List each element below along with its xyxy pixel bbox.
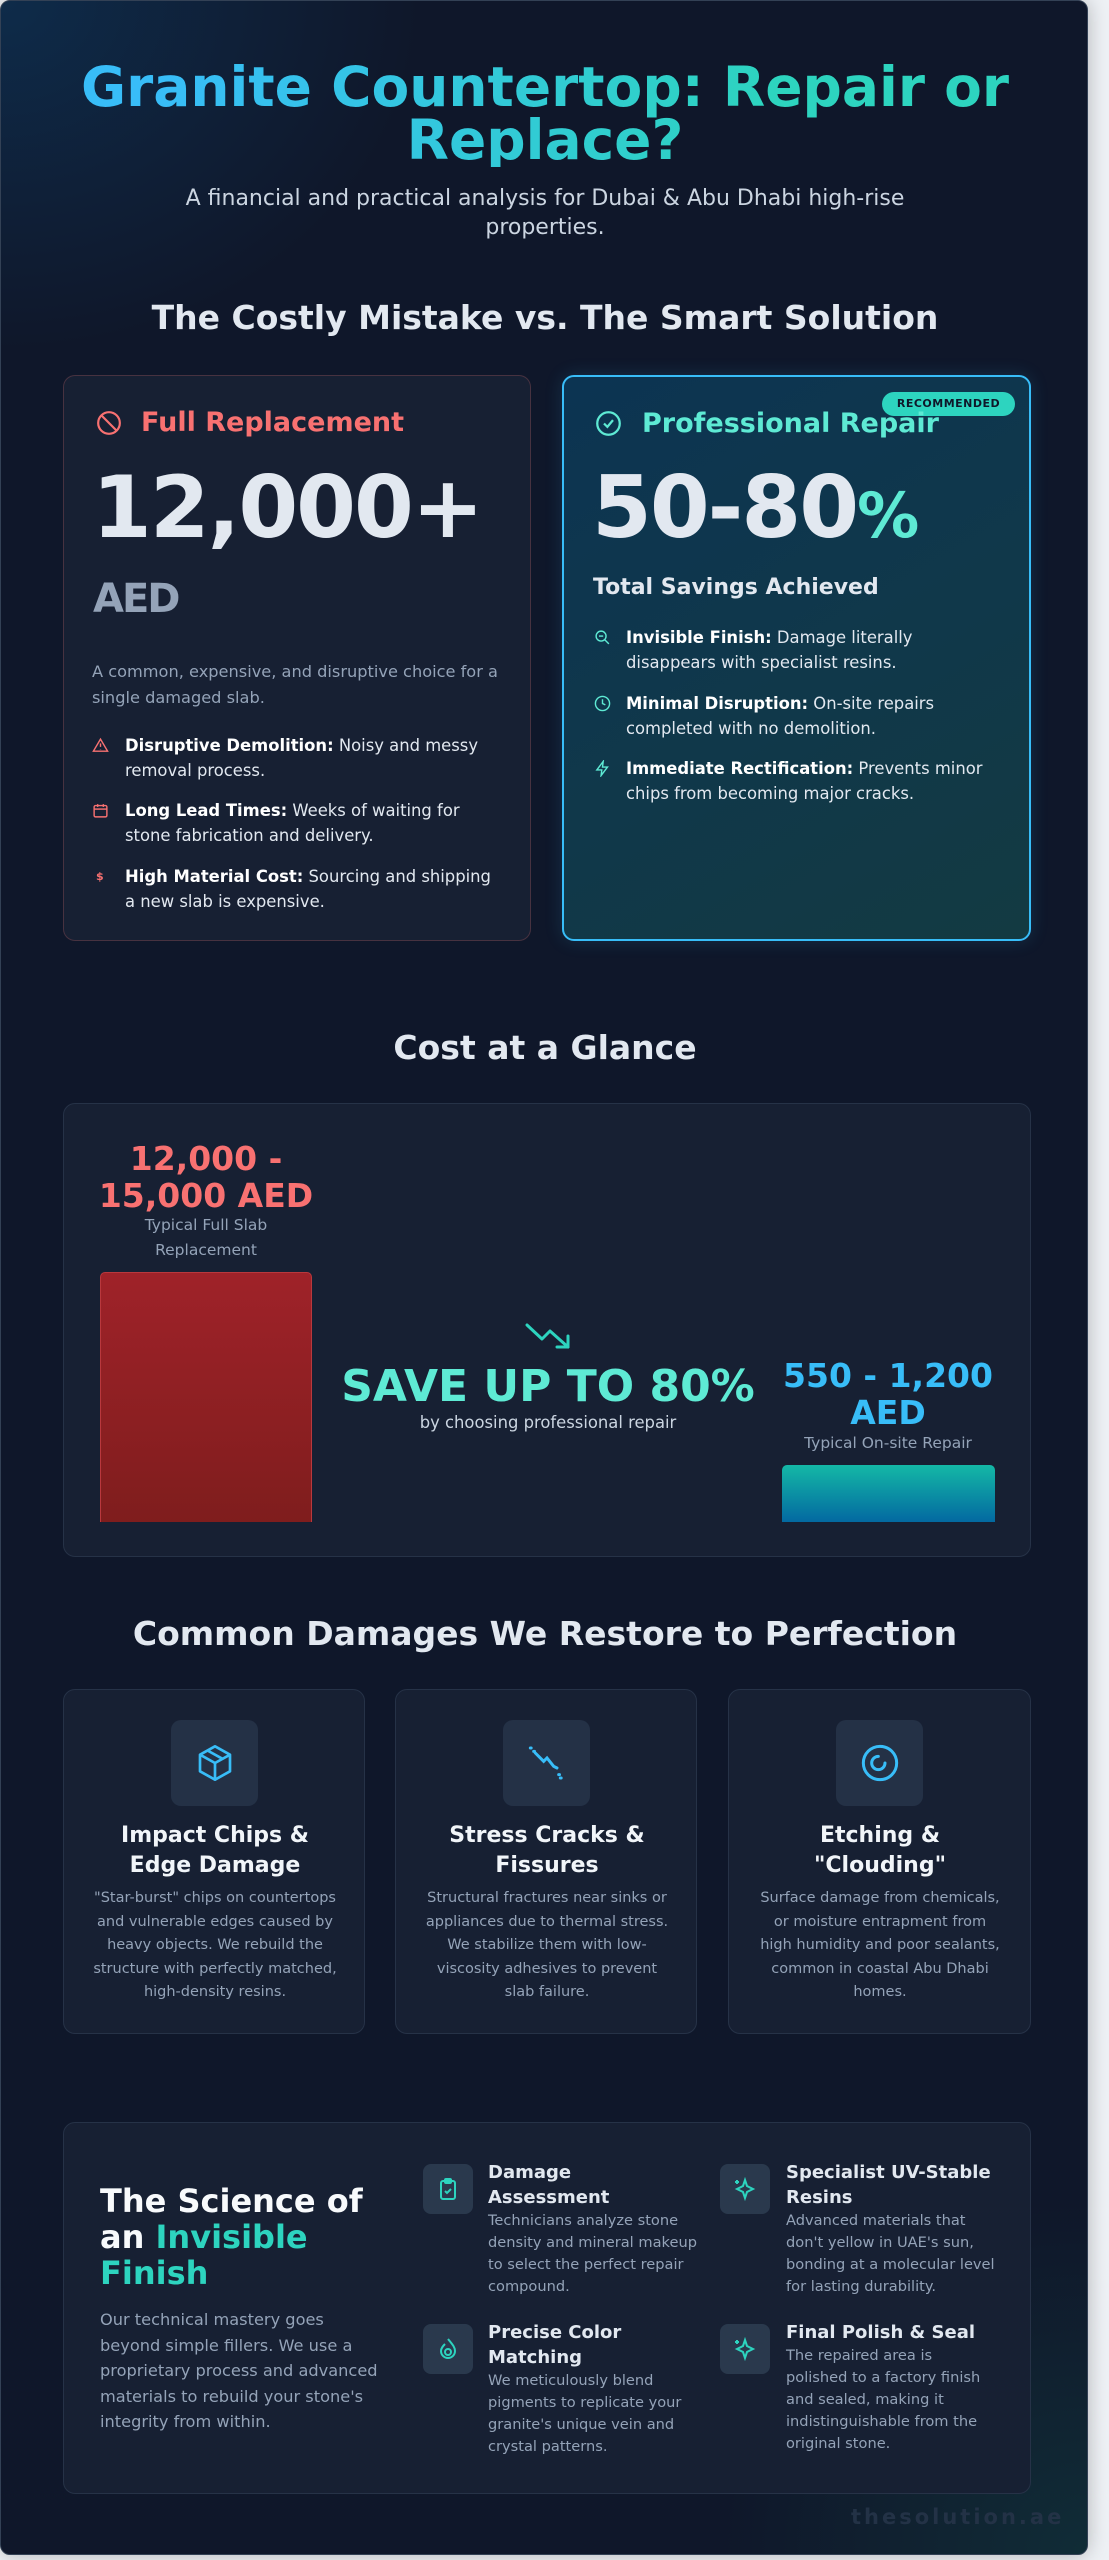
item: color matching [423,2322,682,2455]
item: final polish: and sealed, making it [786,2391,944,2408]
label: replacement cost: 12,000 - [130,1139,282,1178]
item: uv-stable resins: don't yellow in UAE's sun, [786,2234,974,2251]
card text: or moisture entrapment from [774,1914,986,1930]
paragraph [100,2310,378,2431]
big number: 50-80%: 50-80% [592,458,919,558]
card text: heavy objects. We rebuild the [107,1937,323,1953]
card title: "Clouding" [814,1853,946,1878]
subtitle: A financial and practical analysis for Dubai & Abu Dhabi high-rise [186,186,904,211]
item: damage assessment: to select the perfect repair [488,2256,684,2273]
item: uv-stable resins: bonding at a molecular level [786,2256,995,2273]
heading: common damages: Common Damages We Restore to Perfection [133,1614,957,1653]
item: color matching: Precise Color [488,2322,621,2343]
heading: cost at a glance: Cost at a Glance [393,1028,697,1067]
badge: recommended: RECOMMENDED [897,397,1000,410]
item: uv-stable resins: Specialist UV-Stable [786,2162,991,2183]
paragraph: materials to rebuild your stone's [100,2386,363,2406]
card text: "Star-burst" chips on countertops [94,1890,336,1906]
card text: homes. [853,1984,907,2000]
list item: demolition: removal process. [125,761,265,780]
icon: crack [503,1720,590,1806]
heading: full replacement: Full Replacement [141,407,404,438]
card title: Etching & [820,1823,940,1848]
list item: invisible finish: disappears with specialist resins. [626,653,897,672]
list item: material cost: High Material Cost: Sourcing and shipping [125,867,491,886]
heading: science: an Invisible [100,2218,308,2256]
subheading: total savings: Total Savings Achieved [593,575,879,600]
list item: invisible finish: Invisible Finish: Damage literally [626,628,912,647]
card text: and vulnerable edges caused by [97,1914,333,1930]
item: final polish: The repaired area is [786,2347,932,2364]
card text [93,1890,337,2000]
paragraph: beyond simple fillers. We use a [100,2336,352,2354]
item: damage assessment: Damage [488,2162,571,2183]
card text: Surface damage from chemicals, [760,1890,1000,1906]
label: repair cost: 550 - 1,200 [783,1356,993,1395]
card text: common in coastal Abu Dhabi [771,1961,989,1977]
item: damage assessment: Assessment [488,2187,609,2208]
list item: lead times: Long Lead Times: Weeks of waiting for [125,801,460,820]
card text: structure with perfectly matched, [93,1961,337,1977]
list item: demolition: Disruptive Demolition: Noisy and messy [125,736,478,755]
bar: repair [782,1465,995,1522]
list item: material cost [96,867,491,911]
item: color matching: crystal patterns. [488,2438,608,2455]
item: color matching: Matching [488,2347,582,2368]
subtitle [186,186,904,240]
card text: slab failure. [505,1984,589,2000]
list item: material cost: $ [96,870,104,883]
icon: check circle [596,411,621,436]
unit: AED: AED [93,576,178,622]
panel: science of an invisible finish [63,2122,1031,2494]
label: repair cost [783,1356,993,1452]
list item: material cost: a new slab is expensive. [125,892,325,911]
description: A common, expensive, and disruptive choice for a [92,662,498,681]
item: final polish [720,2322,980,2452]
label: replacement cost: 15,000 AED [99,1176,313,1215]
icon: ban [97,411,121,435]
item: uv-stable resins [720,2162,995,2295]
card text: Structural fractures near sinks or [427,1890,667,1906]
item: final polish: original stone. [786,2435,890,2452]
card text [426,1890,668,2000]
panel: full replacement [63,375,531,941]
label: repair cost: Typical On-site Repair [804,1434,972,1452]
icon: sparkles [720,2324,770,2374]
icon: swirl [836,1720,923,1806]
list item: rectification: chips from becoming major cracks. [626,784,914,803]
card text: high-density resins. [144,1984,286,2000]
card text: high humidity and poor sealants, [760,1937,1000,1953]
item: damage assessment: compound. [488,2278,570,2295]
heading: science [100,2182,363,2292]
panel: etching [728,1689,1031,2034]
card title [121,1823,309,1878]
list item: minimal disruption: completed with no demolition. [626,719,876,738]
label: repair cost: AED [850,1393,926,1432]
icon: palette drop [423,2324,473,2374]
icon: sparkles [720,2164,770,2214]
list item: lead times: stone fabrication and delivery. [125,826,374,845]
list item: lead times [93,801,460,845]
item: damage assessment [423,2162,697,2295]
panel: stress cracks [395,1689,697,2034]
item: uv-stable resins: for lasting durability. [786,2278,936,2295]
item: damage assessment: Technicians analyze stone [488,2212,678,2229]
card text: We stabilize them with low- [447,1937,647,1953]
paragraph: proprietary process and advanced [100,2361,378,2380]
item: damage assessment: density and mineral makeup [488,2234,697,2251]
icon: box [171,1720,258,1806]
panel: cost chart [63,1103,1031,1557]
paragraph: integrity from within. [100,2412,271,2431]
callout: save up to 80%: by choosing professional repair [420,1413,676,1432]
card text: appliances due to thermal stress. [426,1914,668,1930]
item: final polish: Final Polish & Seal [786,2322,975,2343]
card title: Impact Chips & [121,1823,309,1848]
card title [814,1823,946,1878]
bar: replacement [100,1272,312,1522]
card text: viscosity adhesives to prevent [437,1961,657,1977]
icon: trending down arrow [525,1323,570,1349]
heading: professional repair: Professional Repair [642,408,939,439]
label: replacement cost: Replacement [155,1241,257,1259]
list item: invisible finish [595,628,912,672]
subtitle: properties. [485,215,605,240]
heading: science: The Science of [100,2182,363,2220]
badge: recommended [882,392,1015,416]
big number: 12,000+ [92,458,482,558]
card text [760,1890,1000,2000]
item: final polish: indistinguishable from the [786,2413,977,2430]
item: color matching: pigments to replicate your [488,2394,681,2411]
card title [449,1823,645,1878]
list item: rectification [596,759,983,803]
item: uv-stable resins: Resins [786,2187,852,2208]
label: replacement cost: Typical Full Slab [145,1216,267,1234]
icon: clipboard [423,2164,473,2214]
card title: Edge Damage [130,1853,300,1878]
panel: professional repair [562,375,1031,941]
list item: minimal disruption: Minimal Disruption: On-site repairs [626,694,934,713]
heading: costly mistake vs smart solution: The Costly Mistake vs. The Smart Solution [152,298,938,337]
list item: rectification: Immediate Rectification: Prevents minor [626,759,983,778]
heading: science: Finish [100,2254,208,2292]
item: uv-stable resins: Advanced materials that [786,2212,966,2229]
card title: Stress Cracks & [449,1823,645,1848]
description [92,662,498,707]
item: color matching: granite's unique vein and [488,2416,674,2433]
card title: Fissures [495,1853,599,1878]
watermark: thesolution.ae [851,2505,1064,2529]
paragraph: Our technical mastery goes [100,2310,324,2329]
item: color matching: We meticulously blend [488,2372,653,2389]
list item: demolition [92,736,478,780]
callout: save up to 80%: SAVE UP TO 80% [341,1361,755,1412]
description: single damaged slab. [92,688,265,707]
title [1,61,1089,167]
panel: impact chips [63,1689,365,2034]
label: replacement cost [99,1139,313,1259]
item: final polish: polished to a factory finish [786,2369,980,2386]
title: Replace? [407,108,683,172]
list item: minimal disruption [594,694,934,738]
title: Granite Countertop: Repair or [81,55,1009,119]
